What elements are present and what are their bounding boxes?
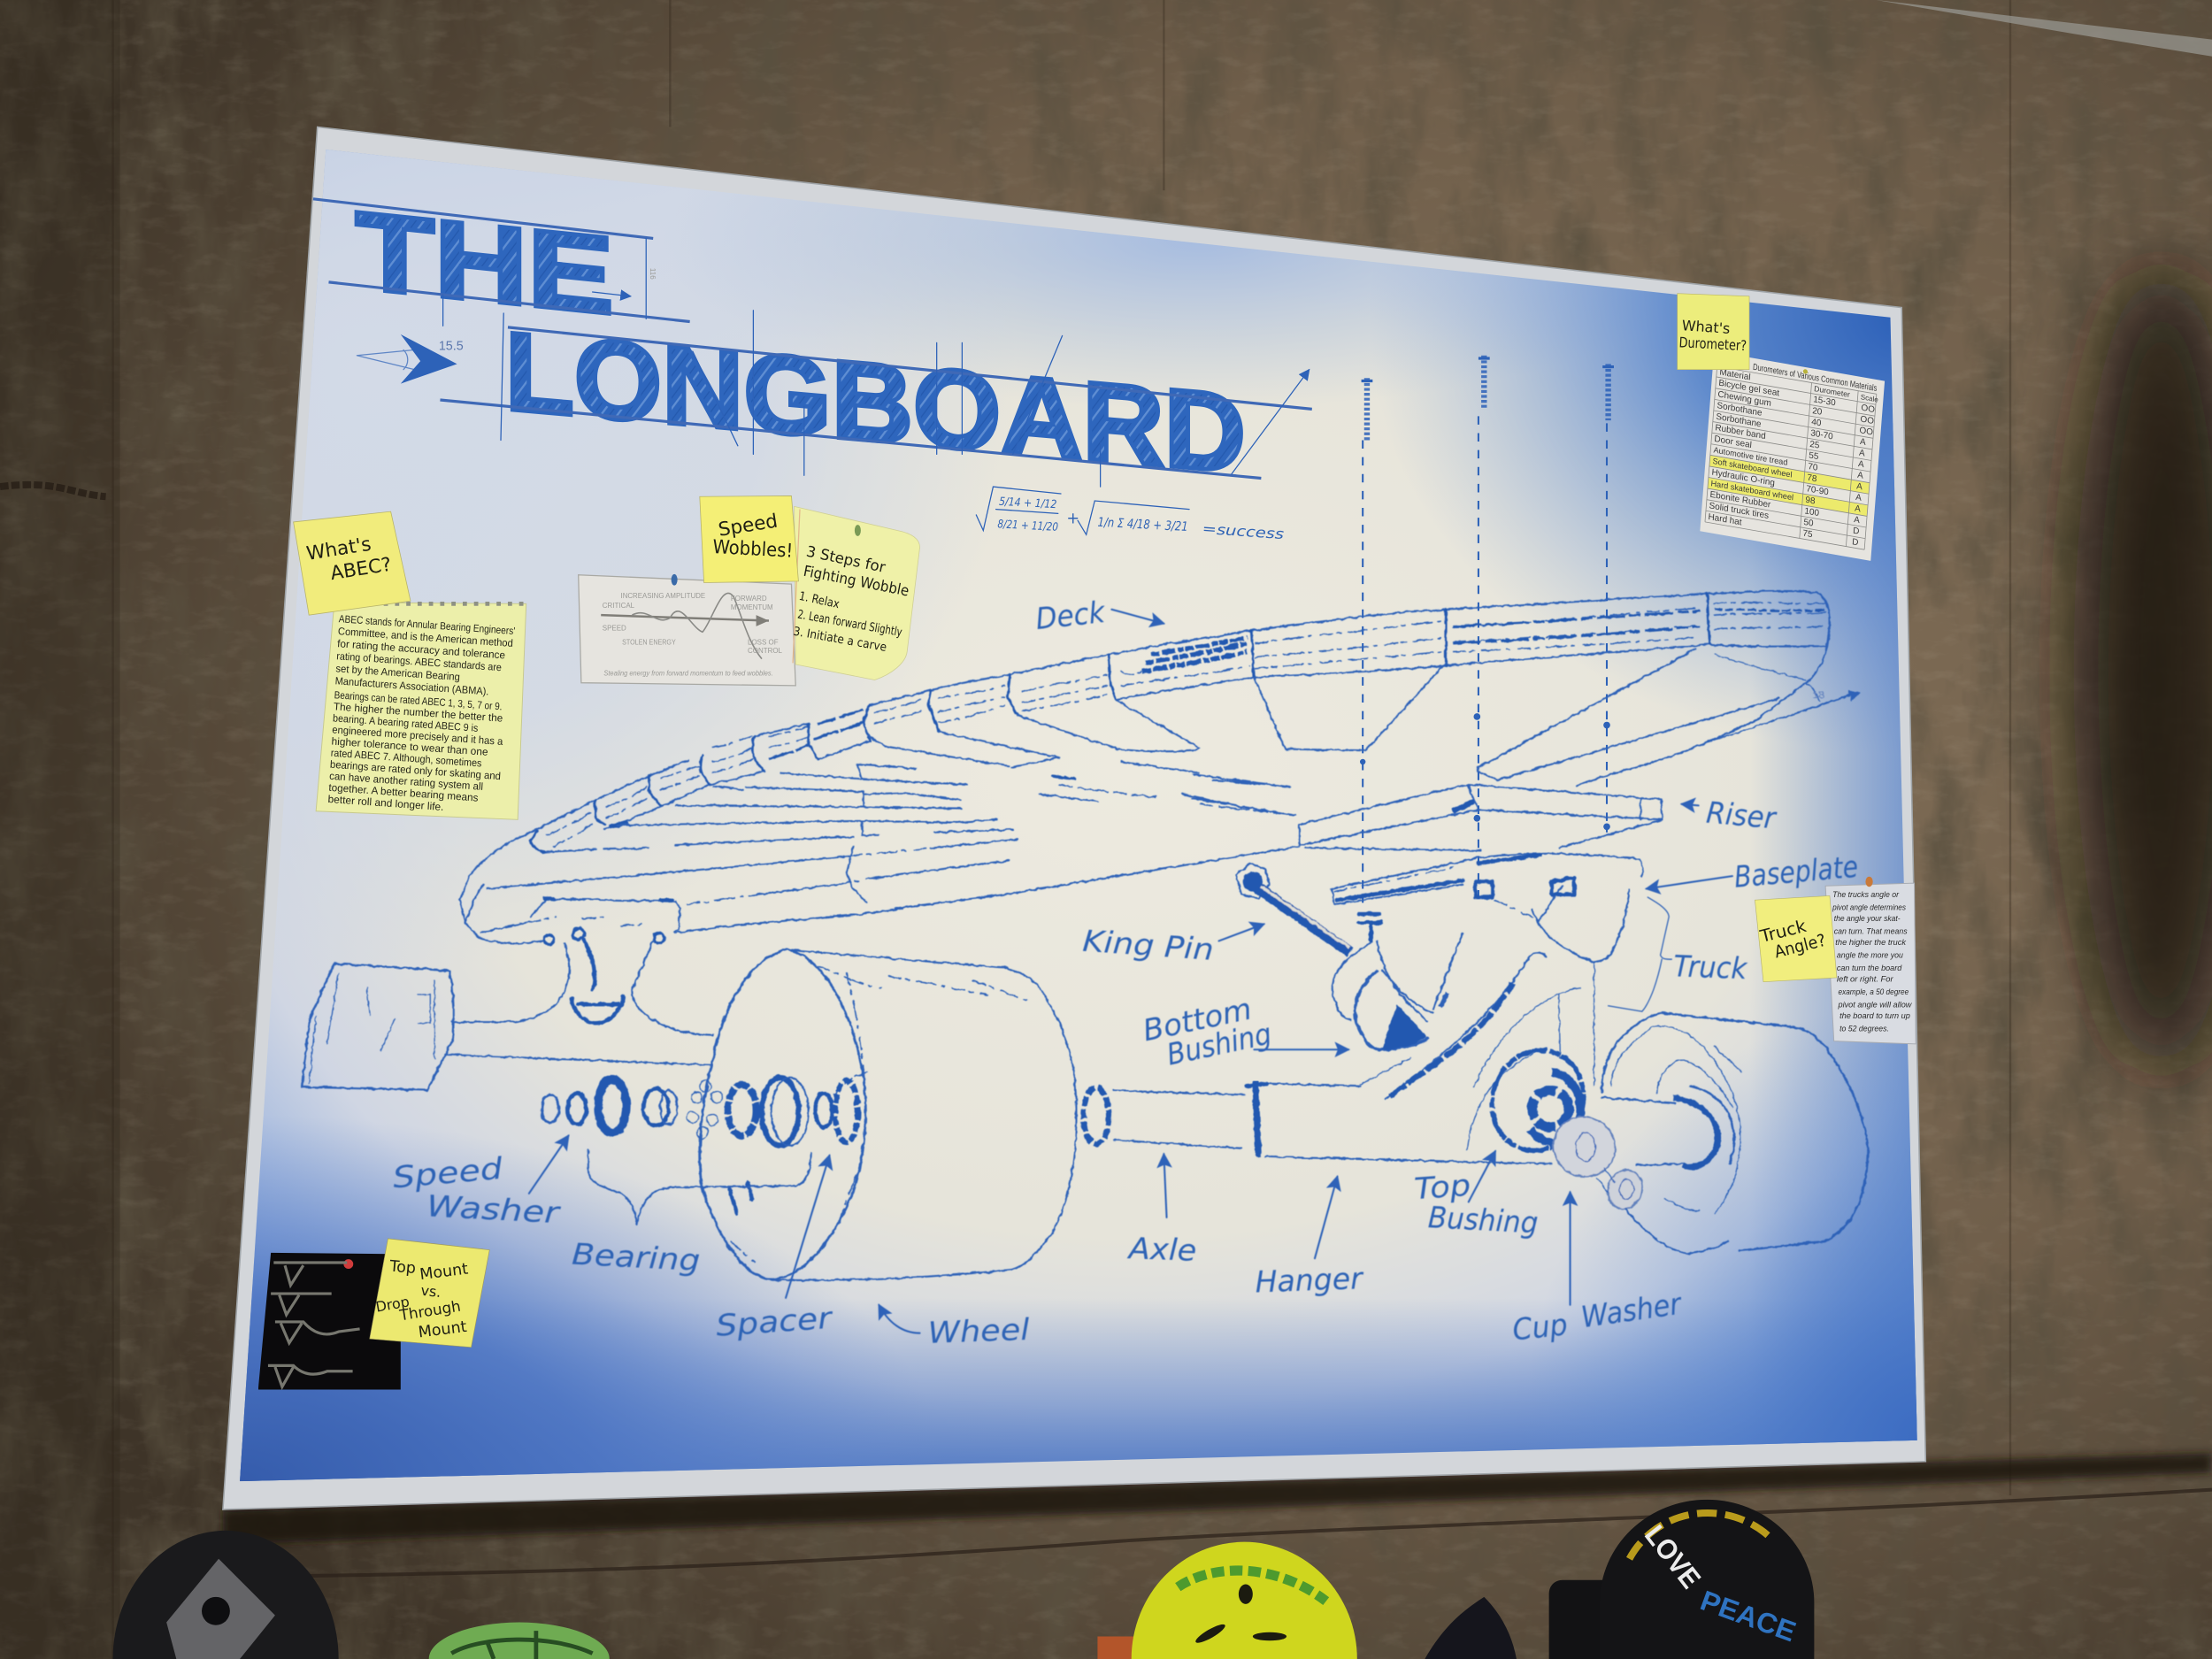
table text: Chewing gum bbox=[1717, 389, 1771, 409]
sticky: What's ABEC? bbox=[294, 511, 411, 615]
table text: A bbox=[1860, 437, 1866, 448]
ABEC note text bbox=[327, 612, 516, 818]
longboard deck drawing: 18 bbox=[1813, 690, 1824, 701]
label: Bottom Bushing: Bottom bbox=[1140, 991, 1255, 1048]
math formula: =success bbox=[1202, 520, 1285, 542]
deck lower lamination lines bbox=[487, 762, 1295, 933]
rear wheel bbox=[1602, 1013, 1868, 1250]
small wheel bbox=[302, 964, 454, 1090]
label: Wheel: Wheel bbox=[927, 1312, 1031, 1350]
front truck and small wheel bbox=[302, 899, 712, 1090]
table text: 98 bbox=[1805, 495, 1816, 507]
ABEC note text: rated ABEC 7. Although, sometimes bbox=[330, 747, 482, 770]
band texture: sketch hatching bbox=[548, 603, 1825, 847]
graph labels: CONTROL bbox=[748, 647, 783, 655]
black fin shape bbox=[1425, 1597, 1517, 1659]
label: Truck with bracket: Truck bbox=[1673, 949, 1748, 986]
graph labels: INCREASING AMPLITUDE bbox=[621, 592, 705, 600]
bearing brace bbox=[588, 1149, 811, 1225]
truck note text: angle the more you bbox=[1837, 951, 1903, 961]
bearing parts bbox=[541, 1078, 857, 1213]
label: Wheel bbox=[879, 1305, 1031, 1350]
king pin bbox=[1236, 864, 1350, 952]
note: 3 steps for fighting wobble bbox=[792, 506, 920, 680]
truck note text: pivot angle will allow bbox=[1838, 1000, 1912, 1010]
cup washer bbox=[1544, 1107, 1624, 1187]
bottom bushing bbox=[1333, 933, 1463, 1049]
label: King Pin: King Pin bbox=[1081, 924, 1215, 967]
table text: Sorbothane bbox=[1716, 412, 1762, 430]
table text: A bbox=[1855, 503, 1862, 515]
sticky: Top Mount vs Drop Through Mount: Drop bbox=[374, 1293, 411, 1316]
sleeve and ring bbox=[1602, 1097, 1683, 1165]
truck note text: pivot angle determines bbox=[1832, 902, 1906, 912]
label: Cup Washer: Cup bbox=[1511, 1307, 1569, 1348]
ABEC note text: The higher the number the better the bbox=[334, 700, 503, 725]
top bushing bbox=[1478, 1037, 1597, 1164]
sticky: What's ABEC?: What's bbox=[305, 534, 373, 565]
table text: A bbox=[1858, 459, 1864, 470]
table text: Automotive tire tread bbox=[1713, 445, 1788, 467]
sticky: What's Durometer?: Durometer? bbox=[1678, 334, 1747, 354]
table text: 30-70 bbox=[1810, 428, 1833, 442]
ABEC note text: engineered more precisely and it has a bbox=[332, 723, 503, 748]
table text: A bbox=[1855, 493, 1863, 503]
title word LONGBOARD: LONGBOARD bbox=[505, 309, 1246, 496]
sticky: Top Mount vs Drop Through Mount bbox=[370, 1239, 489, 1348]
label: Cup Washer bbox=[1511, 1192, 1685, 1348]
math formula: + bbox=[1066, 511, 1079, 528]
table text: Sorbothane bbox=[1717, 401, 1763, 419]
table text: OO bbox=[1861, 403, 1875, 415]
deck band lower edge bbox=[546, 645, 1827, 852]
sticky: Top Mount vs Drop Through Mount: Through bbox=[397, 1297, 462, 1324]
table text: 25 bbox=[1809, 440, 1820, 451]
orange helmet edge bbox=[1097, 1636, 1134, 1659]
math formula: 5/14 + 1/12 bbox=[999, 495, 1057, 511]
ABEC note text: bearing. A bearing rated ABEC 9 is bbox=[333, 711, 479, 734]
label: Top Bushing: Top bbox=[1413, 1168, 1471, 1206]
table text: Rubber band bbox=[1715, 423, 1766, 442]
table text: 75 bbox=[1802, 528, 1813, 540]
note: 3 steps for fighting wobble: 2. Lean forward Slightly bbox=[796, 608, 903, 640]
ABEC note text: rating of bearings. ABEC standards are bbox=[336, 649, 503, 673]
sticky: Speed Wobbles! bbox=[700, 495, 798, 582]
helmet: green striped bbox=[429, 1623, 610, 1659]
truck note text: the board to turn up bbox=[1839, 1011, 1910, 1021]
truck note text bbox=[1832, 890, 1912, 1033]
note spiral holes bbox=[384, 603, 525, 605]
helmet: yellow green bbox=[1132, 1542, 1357, 1659]
truck note text: example, a 50 degree bbox=[1838, 987, 1909, 997]
table text: Hydraulic O-ring bbox=[1711, 468, 1775, 488]
table text: 50 bbox=[1803, 518, 1814, 529]
pointer arrow bbox=[357, 334, 464, 384]
truck note text: can turn. That means bbox=[1834, 926, 1908, 936]
table text: 100 bbox=[1804, 506, 1820, 518]
deck outline bbox=[460, 591, 1830, 900]
band segment lines bbox=[530, 594, 1709, 852]
title: THE LONGBOARD bbox=[313, 189, 1312, 496]
board shadow and wall seam bbox=[211, 1453, 2212, 1578]
table text: Ebonite Rubber bbox=[1709, 490, 1771, 511]
table text: Bicycle gel seat bbox=[1718, 379, 1780, 398]
label: Bottom Bushing: Bushing bbox=[1164, 1017, 1274, 1072]
card: top mount vs drop through diagrams bbox=[258, 1253, 401, 1389]
helmet: Love Peace: PEACE bbox=[1696, 1584, 1800, 1647]
axle line to big wheel bbox=[444, 1055, 712, 1065]
table text: 55 bbox=[1809, 450, 1819, 462]
label: Top Bushing bbox=[1413, 1151, 1539, 1240]
table: durometers of common materials bbox=[1700, 351, 1885, 561]
ABEC note text: better roll and longer life. bbox=[327, 793, 444, 813]
helmet: black patterned bbox=[113, 1531, 339, 1659]
truck note text: left or right. For bbox=[1837, 975, 1893, 985]
sticky: Speed Wobbles!: Wobbles! bbox=[712, 536, 794, 563]
table text: A bbox=[1859, 448, 1865, 459]
truck note text: the angle your skat- bbox=[1834, 914, 1901, 924]
sticky: What's Durometer?: What's bbox=[1681, 317, 1731, 337]
ABEC note text: set by the American Bearing bbox=[335, 662, 460, 683]
sticky: Top Mount vs Drop Through Mount: Top bbox=[388, 1258, 417, 1278]
note: ABEC explanation bbox=[316, 603, 526, 819]
table text: 20 bbox=[1812, 406, 1823, 418]
labels and arrows bbox=[391, 595, 1860, 1350]
table text: Durometer bbox=[1814, 384, 1850, 399]
label: Deck bbox=[1034, 595, 1164, 636]
table text: 70-90 bbox=[1806, 484, 1829, 498]
sticky: Speed Wobbles!: Speed bbox=[717, 511, 780, 541]
label: Cup Washer: Washer bbox=[1579, 1286, 1685, 1334]
label: Spacer: Spacer bbox=[715, 1301, 834, 1343]
drafting lines and dimension arrows: 116 bbox=[649, 268, 657, 280]
axle nut bbox=[1602, 1165, 1647, 1214]
label: King Pin bbox=[1081, 924, 1264, 967]
label: Bottom Bushing bbox=[1140, 991, 1348, 1072]
note: 3 steps for fighting wobble: Fighting Wobble bbox=[802, 562, 910, 600]
label: Truck with bracket bbox=[1609, 897, 1748, 1011]
drafting lines and dimension arrows bbox=[313, 199, 1312, 487]
table text: Door seal bbox=[1714, 434, 1752, 450]
helmet: Love Peace: LOVE bbox=[1639, 1519, 1707, 1594]
sticky: Top Mount vs Drop Through Mount: Mount bbox=[419, 1261, 469, 1284]
graph labels: SPEED bbox=[603, 625, 626, 633]
table text: Soft skateboard wheel bbox=[1712, 457, 1793, 480]
label: Deck: Deck bbox=[1034, 595, 1108, 636]
label: Riser: Riser bbox=[1705, 795, 1778, 835]
axle and hanger base bbox=[1083, 1083, 1552, 1164]
label: Speed Washer: Washer bbox=[426, 1188, 562, 1230]
label: Speed Washer bbox=[391, 1135, 569, 1230]
label: Speed Washer: Speed bbox=[391, 1151, 504, 1194]
ABEC note text: together. A better bearing means bbox=[328, 781, 479, 804]
sticky: Truck Angle?: Angle? bbox=[1772, 930, 1828, 962]
label: Hanger bbox=[1255, 1177, 1365, 1299]
table text: D bbox=[1853, 526, 1860, 537]
baseplate bbox=[1332, 854, 1643, 962]
table text: 15-30 bbox=[1813, 395, 1836, 409]
sticky: Truck Angle?: Truck bbox=[1757, 916, 1809, 947]
bolts and dashed explode lines bbox=[1360, 356, 1614, 902]
table text: OO bbox=[1859, 426, 1873, 438]
board profiles bbox=[268, 1263, 360, 1386]
table text: Material bbox=[1719, 367, 1751, 382]
graph labels: LOSS OF bbox=[748, 639, 779, 647]
truck note text: to 52 degrees. bbox=[1839, 1024, 1889, 1033]
graph labels bbox=[603, 592, 783, 678]
wheel face bbox=[700, 949, 865, 1279]
grid bbox=[1705, 366, 1877, 549]
ABEC note text: for rating the accuracy and tolerance bbox=[337, 637, 506, 661]
label: Axle bbox=[1126, 1154, 1197, 1268]
table text: 40 bbox=[1811, 418, 1822, 429]
graph labels: MOMENTUM bbox=[731, 603, 773, 611]
graph labels: STOLEN ENERGY bbox=[622, 639, 676, 647]
pointer arrow: 15.5 bbox=[439, 339, 464, 353]
ABEC note text: Manufacturers Association (ABMA). bbox=[334, 674, 489, 697]
rear wheel assembly bbox=[1478, 1013, 1868, 1254]
table text: 70 bbox=[1808, 462, 1818, 473]
math formula: 1/n Σ 4/18 + 3/21 bbox=[1097, 516, 1188, 534]
wheel body bbox=[772, 949, 1077, 1280]
label: Axle: Axle bbox=[1126, 1231, 1197, 1268]
table text: A bbox=[1856, 481, 1863, 492]
math formula bbox=[976, 487, 1285, 542]
label: Hanger: Hanger bbox=[1255, 1261, 1365, 1299]
table text: Hard hat bbox=[1708, 512, 1742, 527]
label: Spacer bbox=[715, 1156, 834, 1343]
pin bbox=[672, 574, 678, 586]
ABEC note text: bearings are rated only for skating and bbox=[330, 758, 501, 782]
ABEC note text: Committee, and is the American method bbox=[338, 625, 513, 649]
sticky: Top Mount vs Drop Through Mount: vs. bbox=[420, 1282, 442, 1301]
label: Bearing: Bearing bbox=[571, 1237, 701, 1278]
deck underside panels bbox=[868, 649, 1779, 780]
table text: Solid truck tires bbox=[1709, 501, 1769, 521]
highlighted rows bbox=[1709, 456, 1870, 494]
front baseplate bbox=[530, 899, 680, 933]
dark helmet behind bbox=[1549, 1580, 1633, 1659]
front bushing bbox=[572, 940, 624, 1023]
rear truck bbox=[1236, 854, 1643, 1149]
big wheel bbox=[541, 949, 1077, 1280]
sticky: What's Durometer? bbox=[1678, 294, 1749, 370]
label: Baseplate: Baseplate bbox=[1732, 849, 1860, 895]
label: Baseplate bbox=[1647, 849, 1860, 895]
poster background gradient bbox=[211, 127, 1947, 1509]
table text: Hard skateboard wheel bbox=[1710, 479, 1793, 502]
front hanger arms bbox=[452, 941, 712, 1035]
truck note text: the higher the truck bbox=[1835, 938, 1907, 948]
table text: D bbox=[1852, 537, 1859, 548]
title word THE: THE bbox=[356, 189, 614, 338]
ABEC note text: can have another rating system all bbox=[329, 770, 483, 793]
label: Top Bushing: Bushing bbox=[1427, 1200, 1539, 1240]
note: 3 steps for fighting wobble: 1. Relax bbox=[798, 589, 841, 611]
card: speed wobble graph bbox=[579, 574, 795, 686]
hanger curves bbox=[1386, 952, 1546, 1099]
table text: A bbox=[1857, 471, 1863, 481]
ABEC note text: ABEC stands for Annular Bearing Engineers' bbox=[338, 612, 516, 637]
graph labels: FORWARD bbox=[731, 595, 767, 603]
note: 3 steps for fighting wobble: 3. Initiate a carve bbox=[792, 625, 887, 655]
ABEC note text: higher tolerance to wear than one bbox=[331, 735, 488, 758]
math formula: 8/21 + 11/20 bbox=[997, 518, 1058, 534]
ABEC note text: Bearings can be rated ABEC 1, 3, 5, 7 or 9. bbox=[334, 688, 503, 712]
graph labels: CRITICAL bbox=[603, 602, 635, 610]
table text: OO bbox=[1860, 414, 1874, 426]
table text: 78 bbox=[1807, 473, 1817, 484]
longboard deck drawing bbox=[460, 591, 1859, 944]
note: 3 steps for fighting wobble: 3 Steps for bbox=[805, 542, 887, 576]
note: truck angle explanation bbox=[1825, 877, 1916, 1044]
poster board frame bbox=[223, 127, 1925, 1509]
truck note text: can turn the board bbox=[1837, 964, 1902, 973]
sticky: Top Mount vs Drop Through Mount: Mount bbox=[418, 1318, 468, 1341]
baseplate nuts bbox=[1476, 878, 1574, 897]
sticky: What's ABEC?: ABEC? bbox=[329, 554, 393, 585]
helmet: Love Peace bbox=[1600, 1500, 1814, 1659]
sticky: Truck Angle? bbox=[1755, 895, 1837, 982]
table text bbox=[1708, 367, 1879, 549]
truck note text: The trucks angle or bbox=[1832, 890, 1900, 900]
riser bbox=[1299, 784, 1663, 850]
table title: Durometers of Various Common Materials bbox=[1753, 363, 1878, 394]
table text: Scale bbox=[1860, 393, 1879, 404]
graph labels: Stealing energy from forward momentum to feed wobbles. bbox=[603, 670, 773, 678]
table text: A bbox=[1854, 515, 1861, 526]
graph curves bbox=[601, 615, 769, 621]
deck nose lower edge bbox=[460, 847, 1299, 944]
